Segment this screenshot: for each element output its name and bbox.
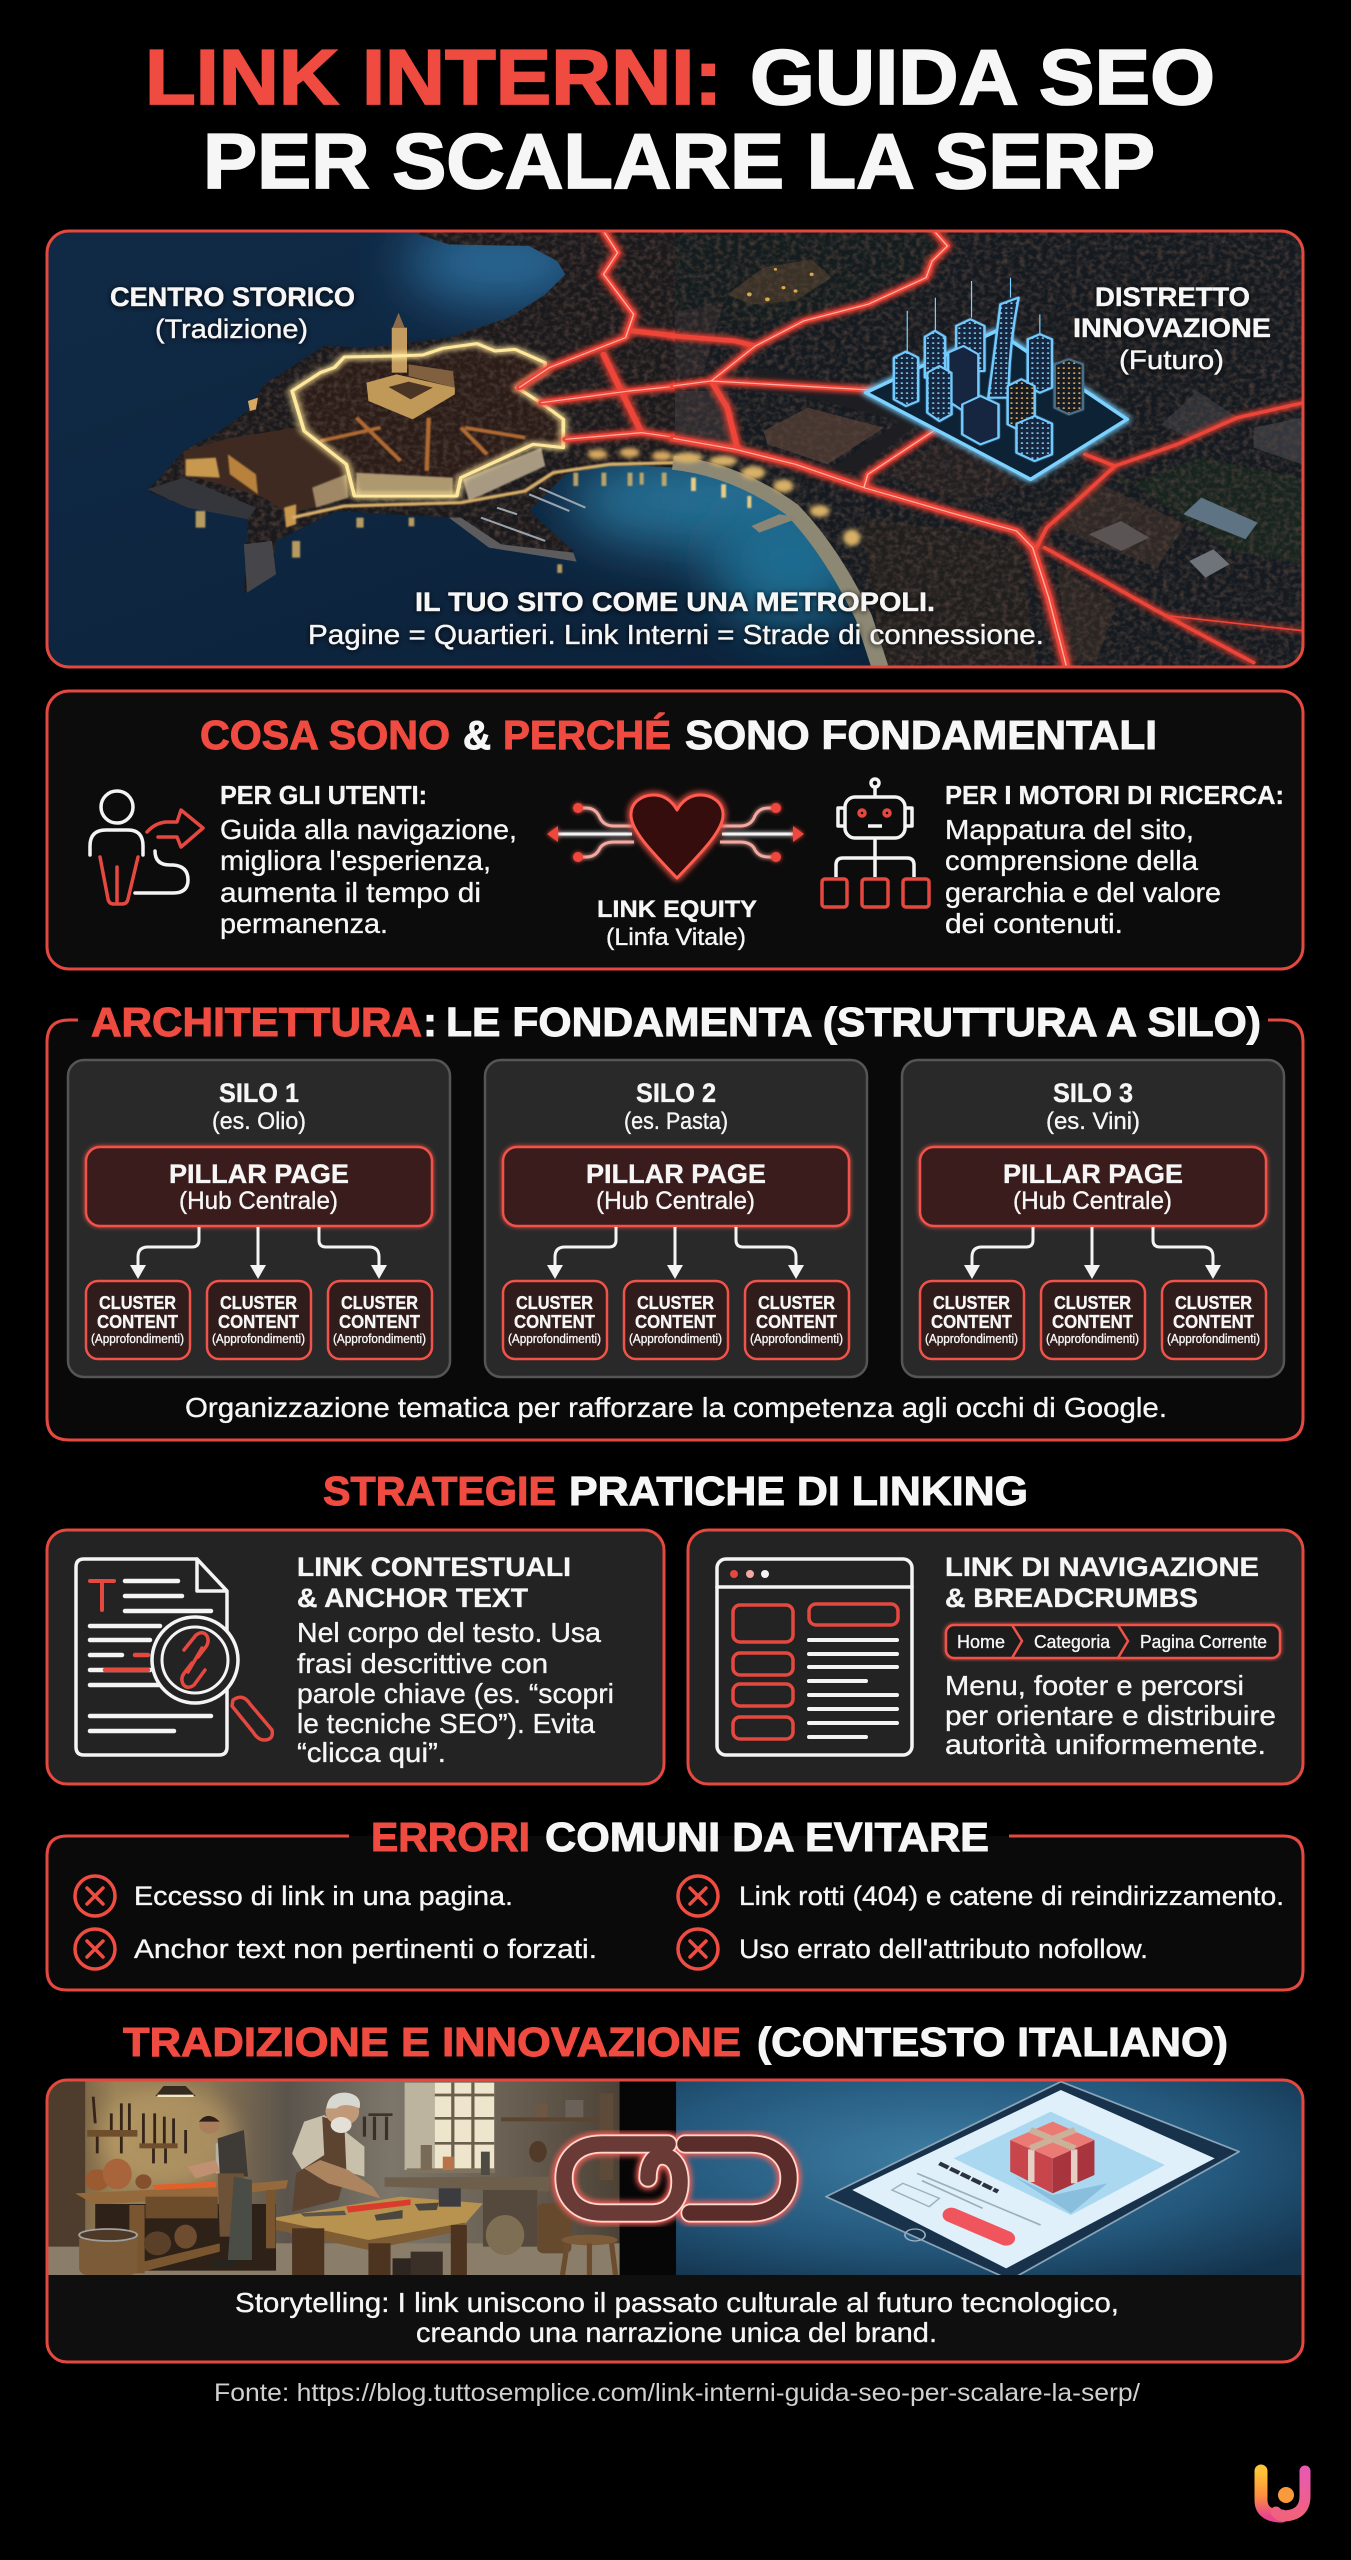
hero label: distretto innovazione: (Futuro) [1119,345,1224,375]
cluster boxes 2: (Approfondimenti) [508,1331,601,1346]
hero caption: Pagine = Quartieri. Link Interni = Strade di connessione. [308,619,1044,650]
pillar page 2: (Hub Centrale) [596,1187,755,1215]
panel: cosa sono e perché [47,691,1303,969]
logo [1261,2471,1305,2516]
hero label: distretto innovazione: DISTRETTO [1095,282,1250,312]
pillar page 1 [86,1147,432,1226]
heading: cosa sono: SONO FONDAMENTALI [685,712,1157,758]
text: link contestuali: frasi descrittive con [297,1648,548,1679]
pillar page 2: PILLAR PAGE [586,1159,766,1189]
cluster boxes 2: (Approfondimenti) [750,1331,843,1346]
pillar page 3 [920,1147,1266,1226]
cluster boxes 3: CLUSTER [1175,1293,1252,1313]
cluster boxes 1: (Approfondimenti) [333,1331,426,1346]
city map east side [671,231,1306,668]
text: per i motori di ricerca [945,780,1284,939]
cluster boxes 1: (Approfondimenti) [212,1331,305,1346]
text: navigazione body: Menu, footer e percorsi [945,1670,1244,1701]
cluster boxes 1: (Approfondimenti) [91,1331,184,1346]
cluster boxes 2: (Approfondimenti) [629,1331,722,1346]
city map west side [147,231,678,593]
text: per i motori di ricerca: gerarchia e del valore [945,877,1221,908]
panel: errori comuni [47,1814,1303,1990]
text: link contestuali: LINK CONTESTUALI [297,1552,571,1582]
heading: architettura: : [423,999,437,1045]
cluster boxes 1: CONTENT [218,1312,299,1332]
red road network [673,231,1305,668]
cluster boxes 2 [503,1281,849,1359]
cluster boxes 3: CONTENT [931,1312,1012,1332]
text: link contestuali: “clicca qui”. [297,1737,446,1768]
cluster boxes 2: CLUSTER [516,1293,593,1313]
cluster boxes 2: CONTENT [635,1312,716,1332]
cluster boxes 3: (Approfondimenti) [925,1331,1018,1346]
text: navigazione body: per orientare e distribuire [945,1700,1276,1731]
image: artisan workshop [47,2080,620,2275]
heading: architettura [91,999,1261,1045]
icon: document with magnifier [76,1559,272,1755]
panel: architettura [47,999,1303,1440]
text: link contestuali: le tecniche SEO”). Evita [297,1708,595,1739]
silo 1: SILO 1 [219,1078,299,1108]
silo 3: (es. Vini) [1046,1108,1140,1135]
heading: cosa sono [200,712,1157,758]
hero label: distretto innovazione: INNOVAZIONE [1073,313,1271,343]
cluster boxes 2: CONTENT [756,1312,837,1332]
text: per i motori di ricerca: Mappatura del sito, [945,814,1194,845]
pillar page 3: PILLAR PAGE [1003,1159,1183,1189]
pillar page 1: (Hub Centrale) [179,1187,338,1215]
cluster boxes 2: CONTENT [514,1312,595,1332]
text: per gli utenti: aumenta il tempo di [220,877,481,908]
heading: tradizione e innovazione [123,2019,1228,2065]
heading: errori [371,1814,989,1860]
error icons [75,1876,718,1969]
text: link contestuali [297,1552,614,1768]
label: link equity [597,896,757,951]
error list [134,1881,1284,1964]
text: link di navigazione: & BREADCRUMBS [945,1583,1198,1613]
pillar page 2 [503,1147,849,1226]
arrows 2 [547,1227,804,1279]
icon: glowing chain link [564,2144,789,2213]
text: link contestuali: & ANCHOR TEXT [297,1583,529,1613]
cluster boxes 3 [920,1281,1266,1359]
text: per i motori di ricerca: dei contenuti. [945,908,1123,939]
error list: Anchor text non pertinenti o forzati. [134,1934,597,1964]
text: per i motori di ricerca: comprensione della [945,845,1198,876]
silo 3 [902,1060,1284,1377]
text: per gli utenti: Guida alla navigazione, [220,814,517,845]
title [145,33,1215,205]
cluster boxes 3: CLUSTER [1054,1293,1131,1313]
hero caption [308,587,1044,650]
text: navigazione body [945,1670,1276,1760]
cluster boxes 2: CLUSTER [758,1293,835,1313]
heading: tradizione e innovazione: (CONTESTO ITALIANO) [757,2019,1228,2065]
hero label: distretto innovazione [1073,282,1271,375]
breadcrumb bar [946,1625,1280,1658]
card: link di navigazione [688,1530,1303,1784]
text: per gli utenti: migliora l'esperienza, [220,845,491,876]
cluster boxes 1: CLUSTER [220,1293,297,1313]
cluster boxes 3: (Approfondimenti) [1167,1331,1260,1346]
text: link di navigazione: LINK DI NAVIGAZIONE [945,1552,1259,1582]
image: digital tablet [676,2080,1312,2280]
heading: architettura: LE FONDAMENTA (STRUTTURA A SILO) [446,999,1261,1045]
cluster boxes 1: CLUSTER [99,1293,176,1313]
icon: browser window [717,1559,912,1755]
storytelling caption: creando una narrazione unica del brand. [416,2317,937,2348]
panel: storytelling [47,2080,1312,2362]
cluster boxes 1 [86,1281,432,1359]
breadcrumb bar: Pagina Corrente [1140,1632,1267,1652]
cluster boxes 1: CLUSTER [341,1293,418,1313]
pillar page 1: PILLAR PAGE [169,1159,349,1189]
pillar page 3: (Hub Centrale) [1013,1187,1172,1215]
cluster boxes 2: CLUSTER [637,1293,714,1313]
silo 2: (es. Pasta) [624,1108,728,1135]
icon: heart link equity [547,795,804,878]
heading: strategie [323,1468,1028,1514]
icon: user with arrow [90,791,203,904]
cluster boxes 1: CONTENT [97,1312,178,1332]
silo 2 [485,1060,867,1377]
text: per gli utenti: permanenza. [220,908,388,939]
silo 1: (es. Olio) [212,1108,306,1135]
cluster boxes 3: CONTENT [1052,1312,1133,1332]
cluster boxes 1: CONTENT [339,1312,420,1332]
heading: cosa sono: PERCHÉ [503,712,671,758]
arrows 1 [130,1227,387,1279]
heading: errori: ERRORI [371,1814,530,1860]
cluster boxes 3: CLUSTER [933,1293,1010,1313]
architecture caption: Organizzazione tematica per rafforzare la competenza agli occhi di Google. [185,1392,1167,1423]
hero caption: IL TUO SITO COME UNA METROPOLI. [415,587,935,617]
heading: strategie: STRATEGIE [323,1468,556,1514]
silo 1 [68,1060,450,1377]
error list: Eccesso di link in una pagina. [134,1881,513,1911]
label: link equity: LINK EQUITY [597,896,757,923]
storytelling caption: Storytelling: I link uniscono il passato culturale al futuro tecnologico, [235,2287,1119,2318]
heading: architettura: ARCHITETTURA [91,999,422,1045]
breadcrumb bar: Home [957,1632,1005,1652]
text: per gli utenti: PER GLI UTENTI: [220,780,427,810]
source line: Fonte: https://blog.tuttosemplice.com/link-interni-guida-seo-per-scalare-la-serp/ [214,2379,1140,2407]
text: link di navigazione [945,1552,1259,1613]
blue innovation district [866,278,1127,479]
hero label: centro storico: CENTRO STORICO [110,282,355,312]
card: link contestuali [47,1530,664,1784]
silo 3: SILO 3 [1053,1078,1133,1108]
heading: cosa sono: & [463,712,491,758]
title: PER SCALARE LA SERP [203,117,1155,205]
cluster boxes 3: CONTENT [1173,1312,1254,1332]
title: LINK INTERNI: [145,33,722,121]
title: GUIDA SEO [750,33,1215,121]
breadcrumb bar: Categoria [1034,1632,1111,1652]
hero label: centro storico [110,282,355,344]
text: navigazione body: autorità uniformemente. [945,1729,1266,1760]
icon: robot sitemap [822,779,929,907]
arrows 3 [964,1227,1221,1279]
silo 2: SILO 2 [636,1078,716,1108]
heading: cosa sono: COSA SONO [200,712,450,758]
text: link contestuali: parole chiave (es. “scopri [297,1678,614,1709]
heading: tradizione e innovazione: TRADIZIONE E INNOVAZIONE [123,2019,741,2065]
heading: strategie: PRATICHE DI LINKING [569,1468,1028,1514]
heading: errori: COMUNI DA EVITARE [545,1814,989,1860]
panel: hero city map [47,220,1306,668]
storytelling caption [235,2287,1119,2348]
hero label: centro storico: (Tradizione) [155,314,308,344]
cluster boxes 3: (Approfondimenti) [1046,1331,1139,1346]
text: per gli utenti [220,780,517,939]
text: link contestuali: Nel corpo del testo. Usa [297,1617,601,1648]
text: per i motori di ricerca: PER I MOTORI DI RICERCA: [945,780,1284,810]
error list: Uso errato dell'attributo nofollow. [739,1934,1148,1964]
error list: Link rotti (404) e catene di reindirizzamento. [739,1881,1284,1911]
label: link equity: (Linfa Vitale) [606,924,746,951]
